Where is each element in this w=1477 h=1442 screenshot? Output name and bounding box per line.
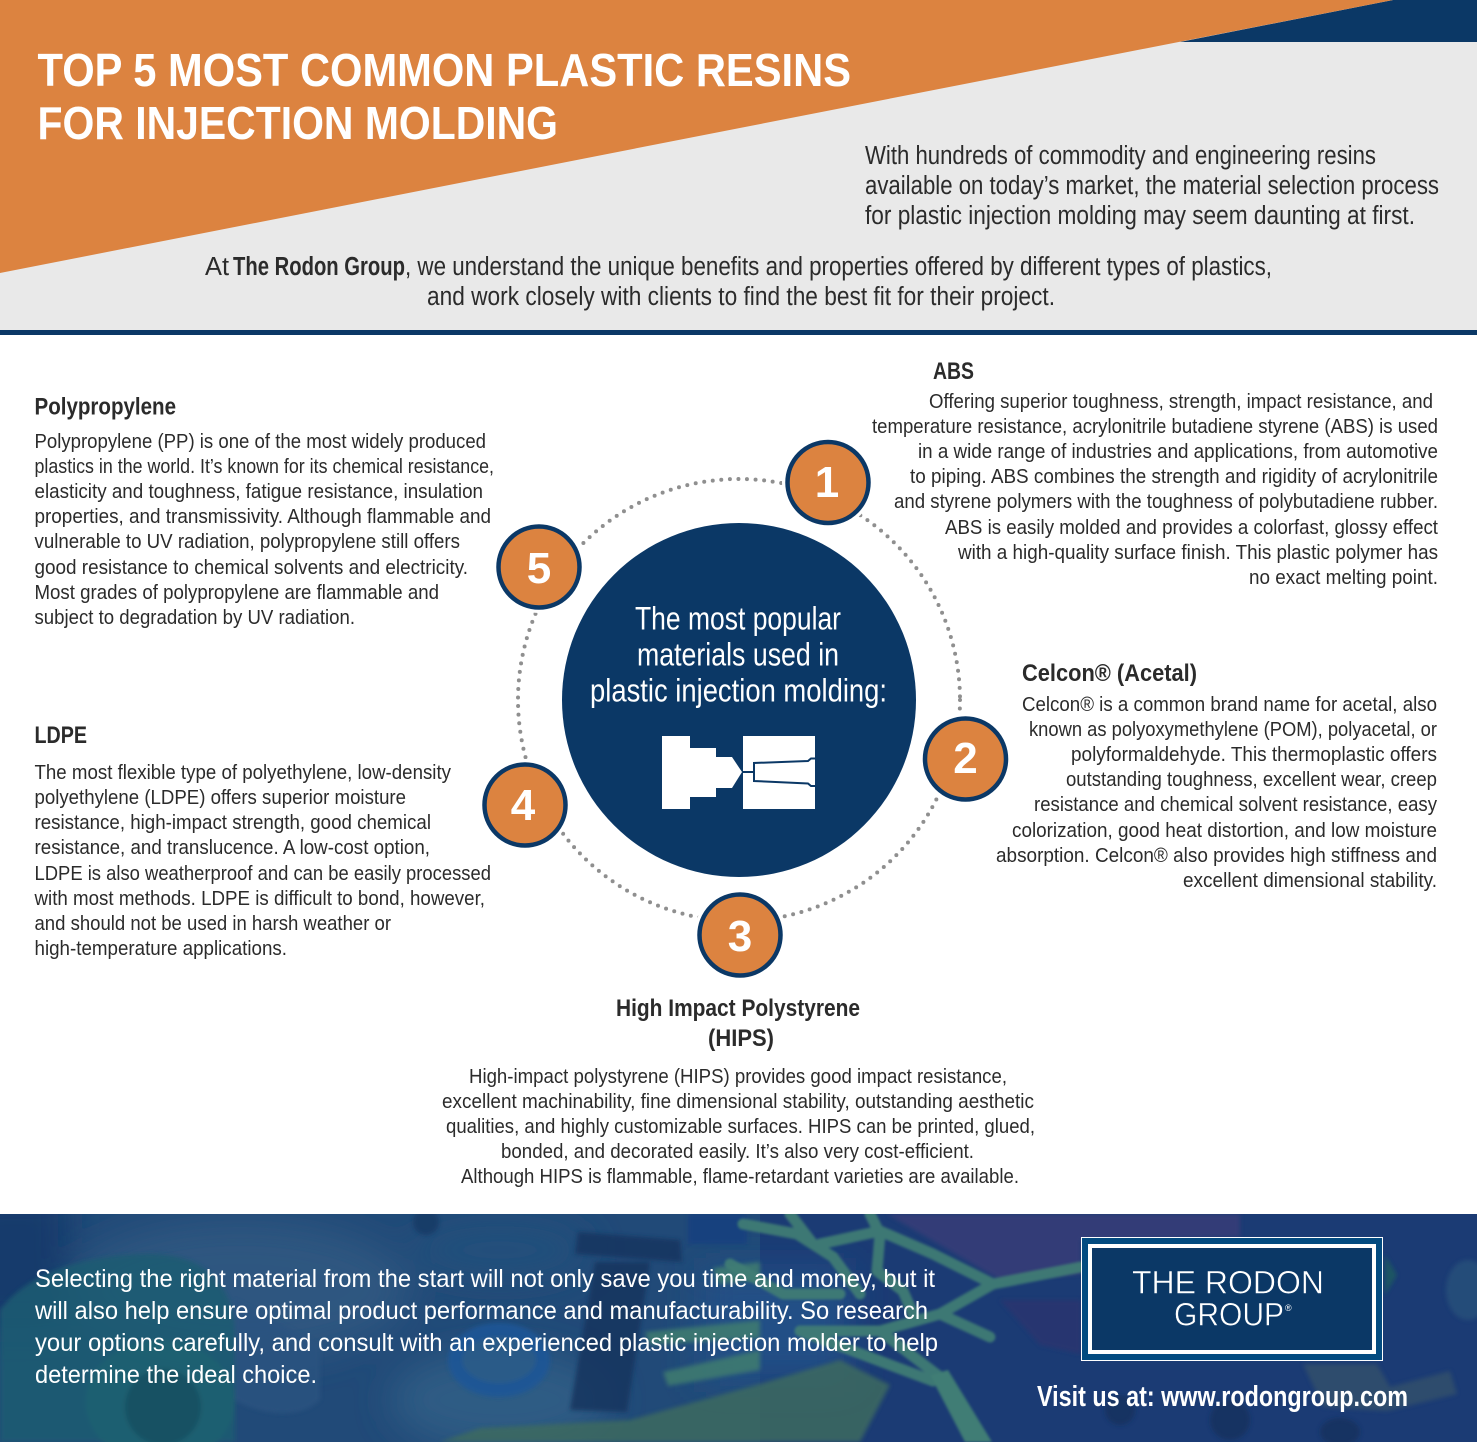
panel: LDPE: polyethylene (LDPE) offers superior moisture [34,786,406,809]
panel: Polypropylene: subject to degradation by UV radiation. [34,606,355,629]
panel: Polypropylene: good resistance to chemical solvents and electricity. [34,556,468,579]
panel: Polypropylene: Polypropylene (PP) is one of the most widely produced [34,430,486,453]
panel: Celcon: Celcon® is a common brand name for acetal, also [1022,693,1437,716]
intro text [865,142,1439,230]
panel: Polypropylene: vulnerable to UV radiation, polypropylene still offers [34,530,460,553]
center circle: The most popular [635,600,841,636]
logo: ® [1285,1303,1292,1313]
dotted ring [518,479,960,921]
panel: HIPS [442,995,1035,1188]
panel: Celcon: polyformaldehyde. This thermoplastic offers [1071,743,1437,766]
closing text: your options carefully, and consult with an experienced plastic injection molder to help [35,1329,938,1357]
panel: ABS: to piping. ABS combines the strength and rigidity of acrylonitrile [910,465,1438,488]
panel: ABS: ABS [933,358,974,385]
panel: LDPE: and should not be used in harsh weather or [34,912,391,935]
panel: Polypropylene: elasticity and toughness, fatigue resistance, insulation [34,480,483,503]
company statement [205,253,1272,311]
panel: LDPE: The most flexible type of polyethylene, low-density [34,761,452,784]
panel: HIPS: Although HIPS is flammable, flame-retardant varieties are available. [461,1165,1019,1188]
panel: HIPS: bonded, and decorated easily. It’s also very cost-efficient. [501,1140,974,1163]
logo: THE RODON [1132,1264,1324,1300]
panel: Celcon [996,660,1438,892]
title: FOR INJECTION MOLDING [38,97,558,149]
number badge 3 [694,889,786,981]
panel: LDPE: with most methods. LDPE is difficult to bond, however, [34,887,485,910]
title [38,44,851,149]
center circle: materials used in [637,636,839,672]
number badge 4: 4 [511,781,536,830]
panel: LDPE: LDPE is also weatherproof and can be easily processed [34,862,491,885]
panel: HIPS: High Impact Polystyrene [616,995,860,1022]
closing text: Selecting the right material from the start will not only save you time and money, but it [35,1265,935,1293]
panel: HIPS: High-impact polystyrene (HIPS) provides good impact resistance, [469,1065,1007,1088]
number badge 2: 2 [953,734,978,783]
panel: ABS: ABS is easily molded and provides a colorfast, glossy effect [945,516,1438,539]
panel: HIPS: (HIPS) [708,1025,774,1052]
icon: injection mold [662,736,815,809]
company statement: At [205,253,229,281]
intro text: for plastic injection molding may seem daunting at first. [865,202,1415,230]
panel: Polypropylene: Polypropylene [34,394,176,420]
header panel [0,0,1477,335]
panel: Celcon: colorization, good heat distortion, and low moisture [1012,819,1437,842]
logo [1082,1238,1382,1360]
closing text: determine the ideal choice. [35,1361,317,1389]
panel: ABS: Offering superior toughness, strength, impact resistance, and [929,390,1433,413]
number badge 2 [920,713,1012,805]
closing text [34,1265,938,1389]
panel: Polypropylene: Most grades of polypropylene are flammable and [34,581,439,604]
center circle [562,523,916,877]
panel: ABS: in a wide range of industries and applications, from automotive [918,440,1438,463]
panel: Polypropylene: properties, and transmissivity. Although flammable and [34,505,491,528]
panel: LDPE: resistance, high-impact strength, good chemical [34,811,431,834]
logo: GROUP [1174,1296,1284,1332]
panel: LDPE [34,722,491,960]
panel: HIPS: excellent machinability, fine dimensional stability, outstanding aesthetic [442,1090,1034,1113]
footer background [0,1190,1477,1442]
panel: ABS: with a high-quality surface finish. This plastic polymer has [957,541,1438,564]
number badge 5: 5 [527,544,551,593]
panel: LDPE: LDPE [34,722,87,749]
closing text: will also help ensure optimal product performance and manufacturability. So research [34,1297,928,1325]
center circle: plastic injection molding: [590,672,887,708]
panel: Celcon: Celcon® (Acetal) [1022,660,1197,687]
intro text: With hundreds of commodity and engineering resins [865,142,1376,170]
panel: ABS: and styrene polymers with the toughness of polybutadiene rubber. [894,490,1438,513]
panel: Celcon: excellent dimensional stability. [1183,869,1437,892]
panel: LDPE: high-temperature applications. [34,937,287,960]
panel: Celcon: resistance and chemical solvent resistance, easy [1034,793,1438,816]
panel: HIPS: qualities, and highly customizable surfaces. HIPS can be printed, glued, [446,1115,1035,1138]
number badge 1 [782,436,874,528]
panel: Polypropylene: plastics in the world. It’s known for its chemical resistance, [34,455,494,478]
panel: Celcon: absorption. Celcon® also provides high stiffness and [996,844,1437,867]
panel: ABS: no exact melting point. [1249,566,1438,589]
number badge 1: 1 [815,458,839,507]
panel: LDPE: resistance, and translucence. A low-cost option, [34,836,430,859]
number badge 5 [493,521,585,613]
number badge 3: 3 [728,912,752,961]
panel: Celcon: outstanding toughness, excellent wear, creep [1066,768,1437,791]
title: TOP 5 MOST COMMON PLASTIC RESINS [38,44,851,96]
panel: Polypropylene [34,394,494,629]
company statement: and work closely with clients to find the best fit for their project. [427,283,1055,311]
company statement: The Rodon Group [233,253,405,281]
panel: ABS [872,358,1438,589]
number badge 4 [479,759,571,851]
panel: Celcon: known as polyoxymethylene (POM), polyacetal, or [1029,718,1437,741]
company statement: , we understand the unique benefits and properties offered by different types of plastics, [405,253,1272,281]
